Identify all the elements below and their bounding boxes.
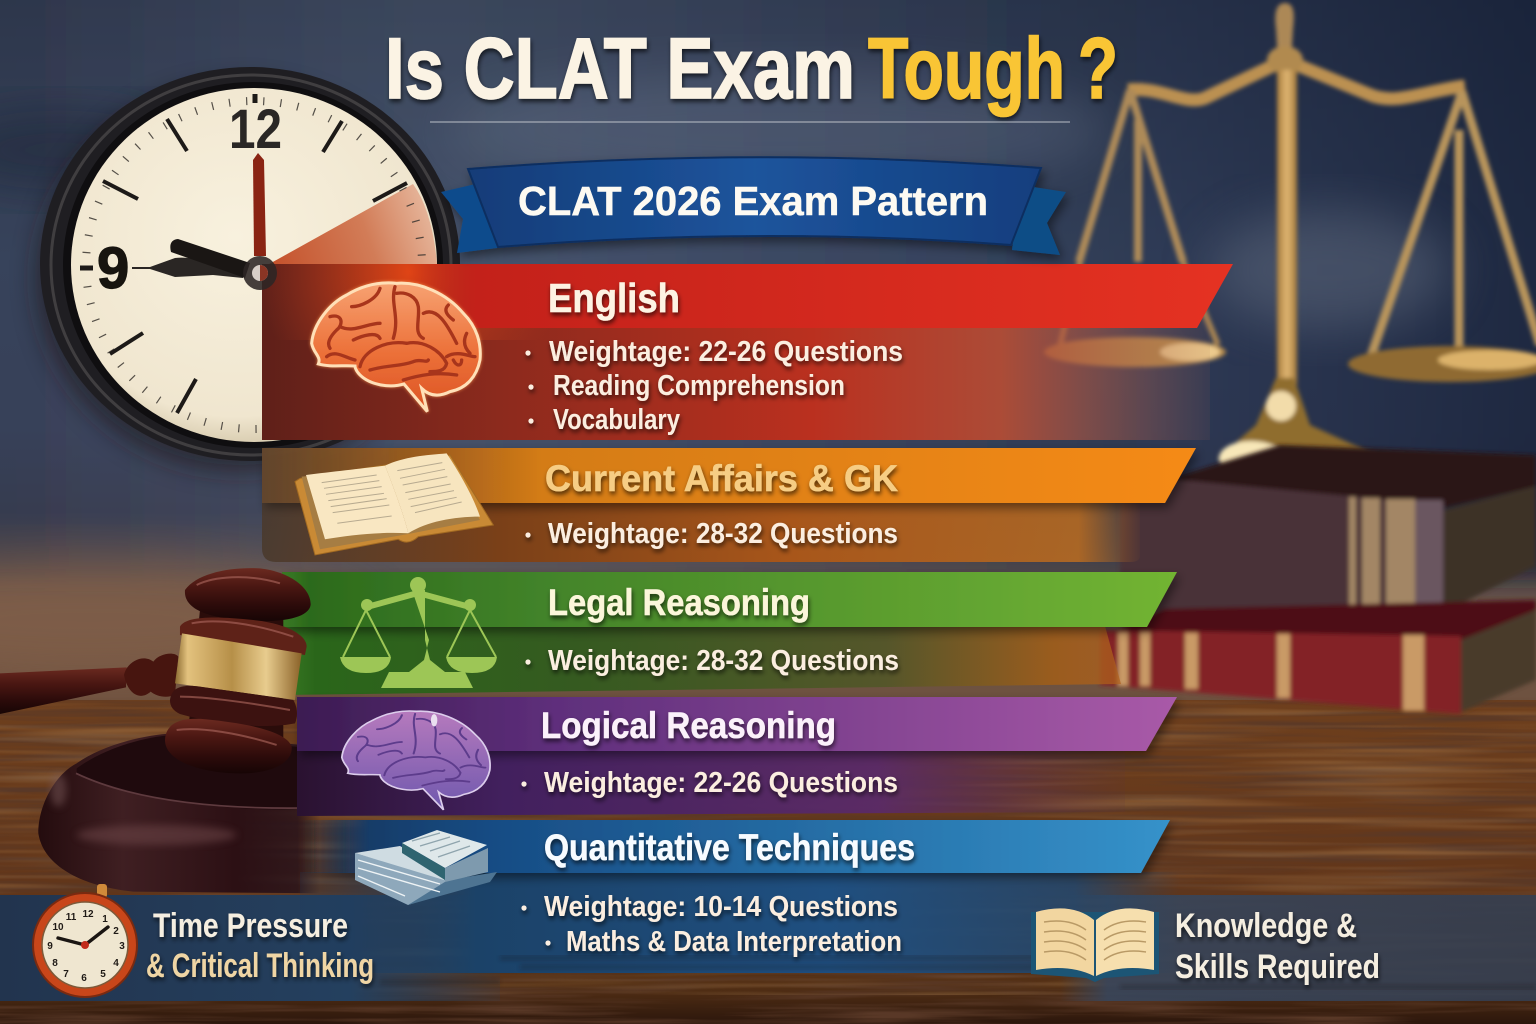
- gavel: [0, 568, 311, 773]
- heading: Logical Reasoning: [541, 705, 836, 746]
- bullet: Weightage: 22-26 Questions: [544, 767, 898, 799]
- bullet list: [525, 336, 903, 436]
- head collar lower: [170, 686, 297, 726]
- icon: open book: [1031, 908, 1159, 982]
- body panel: [297, 750, 1125, 816]
- icon: balance scales: [340, 577, 497, 688]
- icon: stopwatch: 11: [66, 912, 77, 923]
- handle collar: [124, 654, 178, 697]
- icon: stopwatch: 10: [52, 922, 64, 933]
- icon: stopwatch: 9: [47, 941, 53, 952]
- icon: stacked books: [355, 830, 497, 905]
- section: Legal Reasoning: [282, 572, 1177, 695]
- 12 and 9 markers: [80, 94, 255, 268]
- clock face: [71, 88, 437, 442]
- banner body: [468, 157, 1041, 247]
- stacked law books (blurred backdrop): [1100, 445, 1536, 714]
- hot glow at top of panel: [262, 264, 560, 340]
- gold band: [175, 633, 302, 700]
- callout text: Time Pressure: [153, 907, 348, 945]
- strip wood grain: [380, 958, 1536, 987]
- title: Is CLAT Exam: [385, 21, 855, 117]
- head neck: [187, 610, 283, 747]
- body panel: [282, 626, 1121, 695]
- icon: stopwatch: 3: [119, 941, 125, 952]
- bullet list: Vocabulary: [553, 404, 680, 436]
- banner: CLAT 2026 Exam Pattern: [441, 157, 1066, 255]
- callout text: Knowledge &: [1175, 907, 1357, 945]
- ribbon: [262, 448, 1196, 503]
- minute ticks: [86, 101, 422, 429]
- icon: brain: [312, 283, 480, 412]
- title: ?: [1078, 21, 1118, 117]
- icon: stopwatch: 2: [113, 926, 119, 937]
- title underline: [430, 121, 1070, 123]
- ribbon: [282, 572, 1177, 627]
- head top cap: [185, 568, 311, 621]
- heading: English: [548, 275, 680, 321]
- icon: stopwatch: 1: [102, 914, 108, 925]
- right bottom strip: [1060, 895, 1536, 1001]
- bullet list: [521, 891, 902, 958]
- icon: stopwatch: 4: [113, 958, 119, 969]
- banner tail right: [1012, 185, 1066, 255]
- ribbon: [297, 697, 1177, 751]
- ribbon: [300, 820, 1170, 873]
- clock centre pin: [243, 256, 277, 290]
- icon: stopwatch: 7: [63, 969, 69, 980]
- callout: time pressure: [33, 884, 374, 997]
- scales of justice (blurred backdrop): [1044, 3, 1536, 480]
- numeral 12: 12: [229, 97, 282, 160]
- numeral 9: 9: [97, 236, 129, 301]
- second hand: [253, 153, 266, 256]
- callout: knowledge and skills: [1031, 907, 1380, 986]
- icon: stopwatch: 6: [81, 973, 87, 984]
- icon: stopwatch: 8: [52, 958, 58, 969]
- head highlights: [177, 577, 293, 745]
- bullet: Weightage: 28-32 Questions: [548, 518, 898, 550]
- hour hand: [170, 239, 250, 278]
- body panel: [300, 872, 1180, 973]
- minute hand: [132, 258, 243, 278]
- heading: Legal Reasoning: [548, 582, 810, 623]
- section: Current Affairs and GK: [262, 448, 1196, 562]
- bullet: Weightage: 28-32 Questions: [548, 645, 899, 677]
- heading: Current Affairs & GK: [545, 458, 898, 499]
- callout: time pressure: & Critical Thinking: [146, 947, 374, 985]
- banner text: CLAT 2026 Exam Pattern: [518, 178, 988, 224]
- section: Quantitative Techniques: [0, 820, 1536, 1001]
- head bottom cap: [165, 719, 292, 773]
- bullet list: Maths & Data Interpretation: [566, 926, 902, 958]
- callout: knowledge and skills: Skills Required: [1175, 948, 1380, 986]
- icon: stopwatch: [33, 884, 137, 997]
- gavel handle: [0, 667, 127, 714]
- left bottom strip: [0, 895, 500, 1001]
- gavel stand base: [38, 733, 320, 893]
- section: English: [262, 264, 1233, 440]
- icon: stopwatch: 12: [82, 909, 94, 920]
- bullet list: Weightage: 10-14 Questions: [544, 891, 898, 923]
- icon: open book: [295, 453, 493, 555]
- heading: Quantitative Techniques: [544, 827, 915, 868]
- wall clock: [35, 67, 460, 473]
- ribbon: [262, 264, 1233, 328]
- red time wedge: [262, 184, 437, 268]
- icon: purple brain: [342, 711, 490, 810]
- body panel: [262, 264, 1210, 440]
- hour ticks: [103, 119, 407, 413]
- body panel: [262, 448, 1140, 562]
- bullet list: Weightage: 22-26 Questions: [549, 336, 903, 368]
- icon: stopwatch: 5: [100, 969, 106, 980]
- head collar upper: [180, 618, 307, 655]
- banner tail left: [441, 183, 505, 253]
- title: Tough: [868, 21, 1065, 117]
- section: Logical Reasoning: [297, 697, 1177, 816]
- bullet list: Reading Comprehension: [553, 370, 845, 402]
